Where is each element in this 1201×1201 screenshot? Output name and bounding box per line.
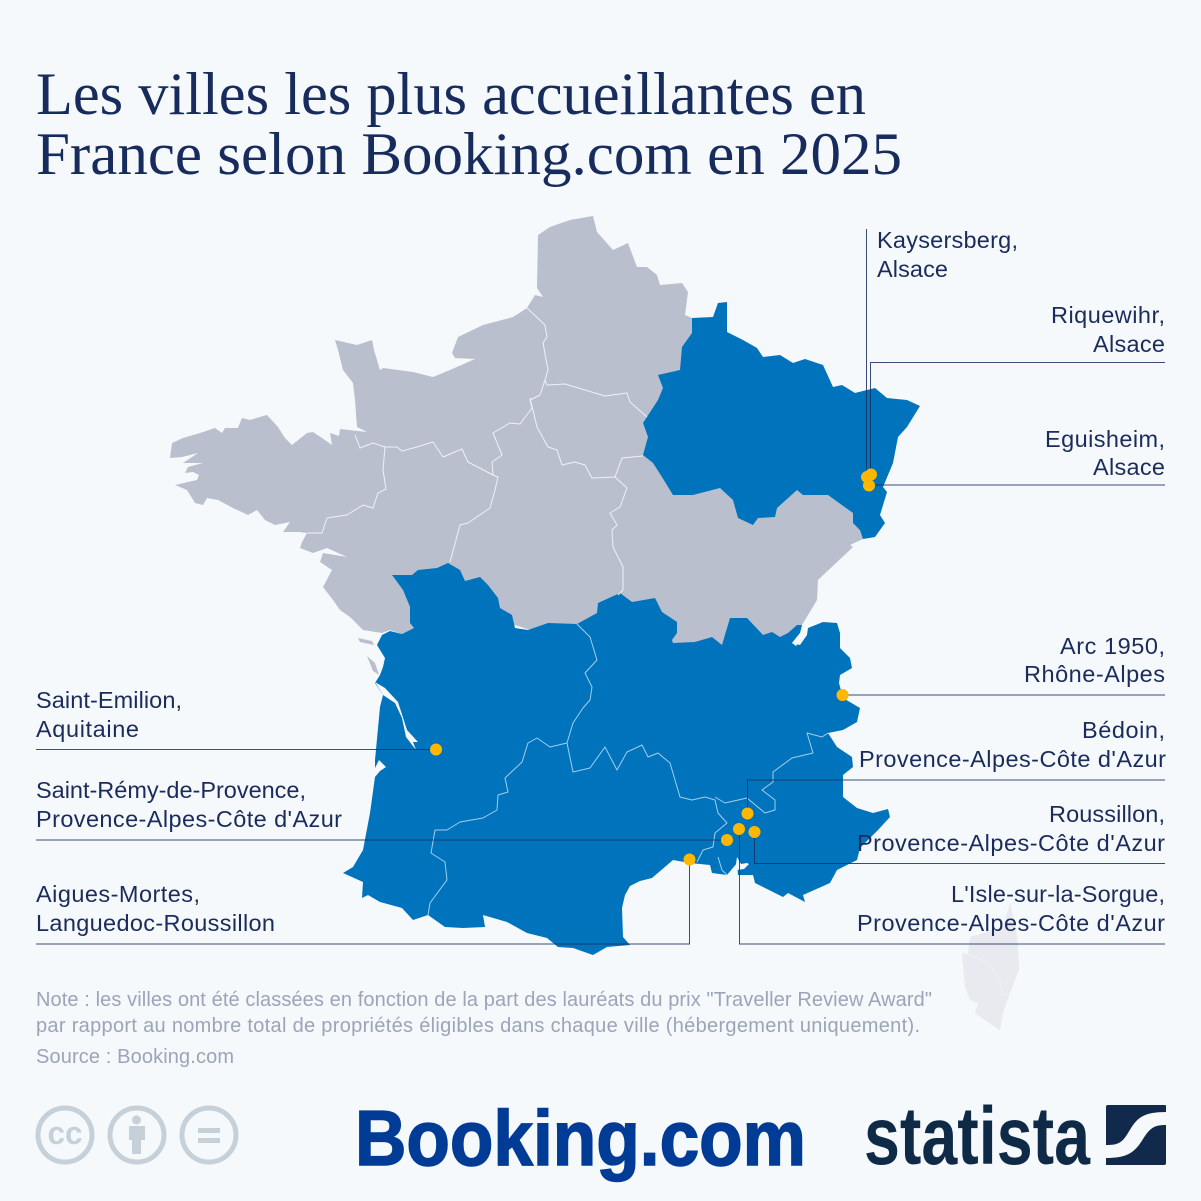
note	[36, 989, 932, 1037]
regions in blue: south of France	[343, 563, 890, 955]
water: Gironde, Arcachon, lagoons	[374, 633, 801, 870]
label: Kaysersberg: Kaysersberg,	[877, 227, 1018, 253]
title: Les villes les plus accueillantes en	[36, 61, 866, 127]
city markers	[430, 468, 877, 866]
label: Bédoin: Bédoin,	[1082, 717, 1165, 743]
label: Bédoin: Provence-Alpes-Côte d'Azur	[859, 746, 1166, 772]
corsica	[962, 903, 1019, 1030]
label: Kaysersberg	[877, 227, 1018, 282]
label: Roussillon: Provence-Alpes-Côte d'Azur	[857, 830, 1165, 856]
source: Source : Booking.com	[36, 1046, 234, 1068]
label: Arc 1950: Arc 1950,	[1060, 633, 1165, 659]
label: Riquewihr	[1051, 302, 1165, 357]
label: Bédoin	[859, 717, 1166, 772]
leader lines	[36, 229, 1165, 944]
icon: no derivatives	[182, 1108, 236, 1162]
label: Saint-Emilion: Aquitaine	[36, 716, 139, 742]
label: L'Isle-sur-la-Sorgue: Provence-Alpes-Côte d'Azur	[857, 910, 1165, 936]
label: L'Isle-sur-la-Sorgue: L'Isle-sur-la-Sorgue,	[951, 881, 1165, 907]
label: Aigues-Mortes: Languedoc-Roussillon	[36, 910, 275, 936]
label: Aigues-Mortes	[36, 881, 275, 936]
label: Saint-Emilion: Saint-Emilion,	[36, 687, 182, 713]
label: Saint-Rémy-de-Provence: Saint-Rémy-de-Provence,	[36, 777, 306, 803]
label: Saint-Rémy-de-Provence: Provence-Alpes-Côte d'Azur	[36, 806, 342, 832]
label: L'Isle-sur-la-Sorgue	[857, 881, 1165, 936]
label: Eguisheim	[1045, 426, 1165, 480]
note: par rapport au nombre total de propriétés éligibles dans chaque ville (hébergement uniquement).	[36, 1015, 920, 1037]
label: Riquewihr: Alsace	[1093, 331, 1165, 357]
note: Note : les villes ont été classées en fonction de la part des lauréats du prix "Traveller Review Award"	[36, 989, 932, 1011]
islands: Ré and Oléron	[358, 638, 379, 675]
label: Saint-Emilion	[36, 687, 182, 742]
regions in blue: Grand Est	[643, 302, 920, 539]
label: Arc 1950: Rhône-Alpes	[1024, 661, 1165, 687]
logo: statista: statista	[864, 1091, 1091, 1182]
label: Roussillon	[857, 801, 1165, 856]
icon: creative commons	[38, 1108, 92, 1162]
region borders north	[307, 308, 647, 595]
regions in grey	[170, 216, 870, 660]
icon: creative commons: cc	[48, 1115, 82, 1151]
label: Saint-Rémy-de-Provence	[36, 777, 342, 832]
title	[36, 61, 902, 187]
title: France selon Booking.com en 2025	[36, 121, 902, 187]
map of France	[170, 216, 1019, 1030]
label: Eguisheim: Eguisheim,	[1045, 426, 1165, 452]
label: Arc 1950	[1024, 633, 1165, 687]
label: Kaysersberg: Alsace	[877, 256, 948, 282]
label: Riquewihr: Riquewihr,	[1051, 302, 1165, 328]
logo: Booking.com: Booking.com	[355, 1094, 806, 1182]
label: Eguisheim: Alsace	[1093, 454, 1165, 480]
icon: statista mark	[1106, 1105, 1166, 1165]
label: Roussillon: Roussillon,	[1049, 801, 1165, 827]
region borders south	[428, 624, 828, 915]
icon: attribution	[110, 1108, 164, 1162]
label: Aigues-Mortes: Aigues-Mortes,	[36, 881, 200, 907]
